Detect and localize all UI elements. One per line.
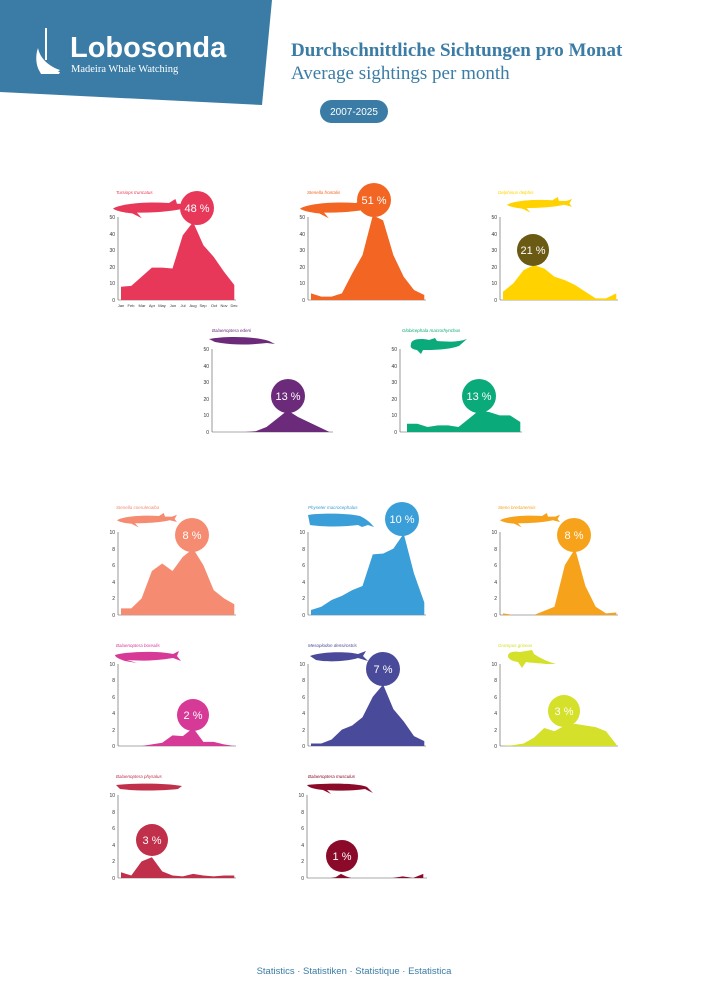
chart: Steno bredanensis: 8 [494,547,497,553]
chart: Stenella coeruleoalba: 10 [109,530,115,536]
chart: Tursiops truncatus: 0 [112,298,115,304]
chart: Balaenoptera borealis: 6 [112,695,115,701]
chart: Steno bredanensis: 4 [494,580,497,586]
chart: Stenella coeruleoalba [109,505,236,619]
chart: Balaenoptera edeni: 0 [206,430,209,436]
chart: Grampus griseus: 0 [494,744,497,750]
chart: Balaenoptera physalus: 8 [112,810,115,816]
chart: Stenella coeruleoalba: 2 [112,596,115,602]
chart: Balaenoptera physalus: 0 [112,876,115,882]
chart: Tursiops truncatus: May [158,303,166,308]
chart: Grampus griseus: 10 [491,662,497,668]
chart: Stenella coeruleoalba: 8 % [183,530,202,542]
chart: Globicephala macrorhynchus: 40 [391,364,397,370]
title [291,40,623,84]
chart: Mesoplodon densirostris: 8 [302,678,305,684]
chart: Delphinus delphis: 50 [491,215,497,221]
chart: Balaenoptera borealis: 10 [109,662,115,668]
chart: Physeter macrocephalus: 10 % [389,514,415,526]
chart: Mesoplodon densirostris: 7 % [374,664,393,676]
chart: Globicephala macrorhynchus: 30 [391,380,397,386]
chart: Tursiops truncatus: Apr [149,303,156,308]
chart: Balaenoptera edeni: Balaenoptera edeni [212,328,252,333]
chart: Delphinus delphis: 21 % [520,245,546,257]
chart: Globicephala macrorhynchus: Globicephala macrorhynchus [402,328,461,333]
chart: Stenella coeruleoalba: Stenella coeruleoalba [116,505,160,510]
chart: Globicephala macrorhynchus [391,328,522,436]
chart: Steno bredanensis: 10 [491,530,497,536]
chart: Globicephala macrorhynchus: 0 [394,430,397,436]
chart: Stenella frontalis: 20 [299,265,305,271]
chart: Globicephala macrorhynchus: 13 % [466,391,492,403]
chart: Balaenoptera borealis: 2 [112,728,115,734]
icon: sailing boat [36,28,60,74]
chart: Stenella frontalis: 0 [302,298,305,304]
chart: Tursiops truncatus: Aug [189,303,197,308]
chart: Stenella coeruleoalba: 0 [112,613,115,619]
pill: years [320,100,388,123]
chart: Physeter macrocephalus: 0 [302,613,305,619]
chart: Balaenoptera musculus: 10 [298,793,304,799]
chart: Physeter macrocephalus: 4 [302,580,305,586]
chart: Delphinus delphis: Delphinus delphis [498,190,534,195]
chart: Grampus griseus: Grampus griseus [498,643,533,648]
chart: Tursiops truncatus: Sep [199,303,207,308]
chart: Balaenoptera edeni [203,328,333,436]
chart: Tursiops truncatus: Oct [211,303,218,308]
chart: Physeter macrocephalus [299,502,426,619]
chart: Tursiops truncatus: Mar [139,303,146,308]
chart: Tursiops truncatus: 50 [109,215,115,221]
title: Durchschnittliche Sichtungen pro Monat [291,40,623,61]
pill: years: 2007-2025 [330,107,378,118]
chart: Tursiops truncatus: Jan [118,303,124,308]
chart: Steno bredanensis: Steno bredanensis [498,505,536,510]
chart: Globicephala macrorhynchus: 50 [391,347,397,353]
chart: Tursiops truncatus: 40 [109,232,115,238]
chart: Stenella frontalis: 40 [299,232,305,238]
chart: Delphinus delphis: 40 [491,232,497,238]
chart: Stenella frontalis: Stenella frontalis [307,190,341,195]
chart: Delphinus delphis: 0 [494,298,497,304]
chart: Delphinus delphis: 10 [491,281,497,287]
chart: Grampus griseus: 3 % [555,706,574,718]
chart: Mesoplodon densirostris: 10 [299,662,305,668]
chart: Grampus griseus: 8 [494,678,497,684]
title: Average sightings per month [291,63,510,84]
chart: Balaenoptera physalus: Balaenoptera physalus [116,774,163,779]
chart: Balaenoptera musculus: 2 [301,859,304,865]
chart: Stenella frontalis: 10 [299,281,305,287]
chart: Delphinus delphis: 30 [491,248,497,254]
chart: Balaenoptera borealis: Balaenoptera borealis [116,643,161,648]
chart: Delphinus delphis: 20 [491,265,497,271]
chart: Balaenoptera borealis: 2 % [184,710,203,722]
chart: Balaenoptera borealis: 0 [112,744,115,750]
logo text: Lobosonda [70,32,227,64]
chart: Balaenoptera edeni: 20 [203,397,209,403]
chart: Balaenoptera edeni: 13 % [275,391,301,403]
chart: Physeter macrocephalus: 8 [302,547,305,553]
chart: Stenella frontalis: 50 [299,215,305,221]
chart: Physeter macrocephalus: 2 [302,596,305,602]
chart: Tursiops truncatus: Jun [170,303,176,308]
chart: Balaenoptera physalus: 2 [112,859,115,865]
chart: Steno bredanensis: 8 % [565,530,584,542]
chart: Balaenoptera musculus: Balaenoptera musculus [308,774,356,779]
chart: Tursiops truncatus: Nov [220,303,228,308]
chart: Tursiops truncatus: 10 [109,281,115,287]
chart: Steno bredanensis [491,505,618,619]
chart: Balaenoptera musculus: 8 [301,810,304,816]
chart: Stenella frontalis: 30 [299,248,305,254]
chart: Balaenoptera physalus: 6 [112,826,115,832]
chart: Tursiops truncatus: 20 [109,265,115,271]
chart: Globicephala macrorhynchus: 20 [391,397,397,403]
chart: Tursiops truncatus: Tursiops truncatus [116,190,153,195]
chart: Balaenoptera borealis: 8 [112,678,115,684]
chart: Balaenoptera physalus: 3 % [143,835,162,847]
chart: Delphinus delphis [491,190,618,304]
chart: Balaenoptera musculus [298,774,427,882]
chart: Balaenoptera musculus: 0 [301,876,304,882]
chart: Steno bredanensis: 2 [494,596,497,602]
chart: Steno bredanensis: 6 [494,563,497,569]
chart: Grampus griseus: 4 [494,711,497,717]
chart: Mesoplodon densirostris: Mesoplodon densirostris [308,643,358,648]
footer: Statistics · Statistiken · Statistique · Estatistica [257,966,452,977]
chart: Tursiops truncatus: 48 % [184,203,210,215]
chart: Balaenoptera physalus [109,774,236,882]
chart: Physeter macrocephalus: 6 [302,563,305,569]
chart: Mesoplodon densirostris: 2 [302,728,305,734]
chart: Stenella coeruleoalba: 4 [112,580,115,586]
chart: Balaenoptera edeni: 30 [203,380,209,386]
chart: Mesoplodon densirostris: 0 [302,744,305,750]
chart: Grampus griseus: 2 [494,728,497,734]
chart: Balaenoptera musculus: 6 [301,826,304,832]
chart: Balaenoptera edeni: 50 [203,347,209,353]
chart: Stenella frontalis: 51 % [361,195,387,207]
chart: Balaenoptera edeni: 10 [203,413,209,419]
chart: Stenella coeruleoalba: 8 [112,547,115,553]
chart: Tursiops truncatus: Jul [180,303,186,308]
chart: Tursiops truncatus: 30 [109,248,115,254]
chart: Balaenoptera borealis [109,643,236,750]
chart: Mesoplodon densirostris: 6 [302,695,305,701]
chart: Tursiops truncatus [109,190,238,308]
chart: Physeter macrocephalus: Physeter macrocephalus [308,505,358,510]
chart: Grampus griseus [491,643,618,750]
chart: Tursiops truncatus: Dec [230,303,238,308]
header logo banner: Madeira Whale Watching [71,64,179,75]
chart: Balaenoptera edeni: 40 [203,364,209,370]
chart: Stenella coeruleoalba: 6 [112,563,115,569]
chart: Balaenoptera borealis: 4 [112,711,115,717]
chart: Globicephala macrorhynchus: 10 [391,413,397,419]
chart: Steno bredanensis: 0 [494,613,497,619]
chart: Balaenoptera musculus: 4 [301,843,304,849]
chart: Balaenoptera physalus: 10 [109,793,115,799]
chart: Physeter macrocephalus: 10 [299,530,305,536]
chart: Mesoplodon densirostris: 4 [302,711,305,717]
chart: Grampus griseus: 6 [494,695,497,701]
chart: Stenella frontalis [299,183,426,304]
chart: Balaenoptera physalus: 4 [112,843,115,849]
chart: Mesoplodon densirostris [299,643,426,750]
chart: Balaenoptera musculus: 1 % [333,851,352,863]
header logo banner [0,0,272,105]
chart: Tursiops truncatus: Feb [128,303,135,308]
